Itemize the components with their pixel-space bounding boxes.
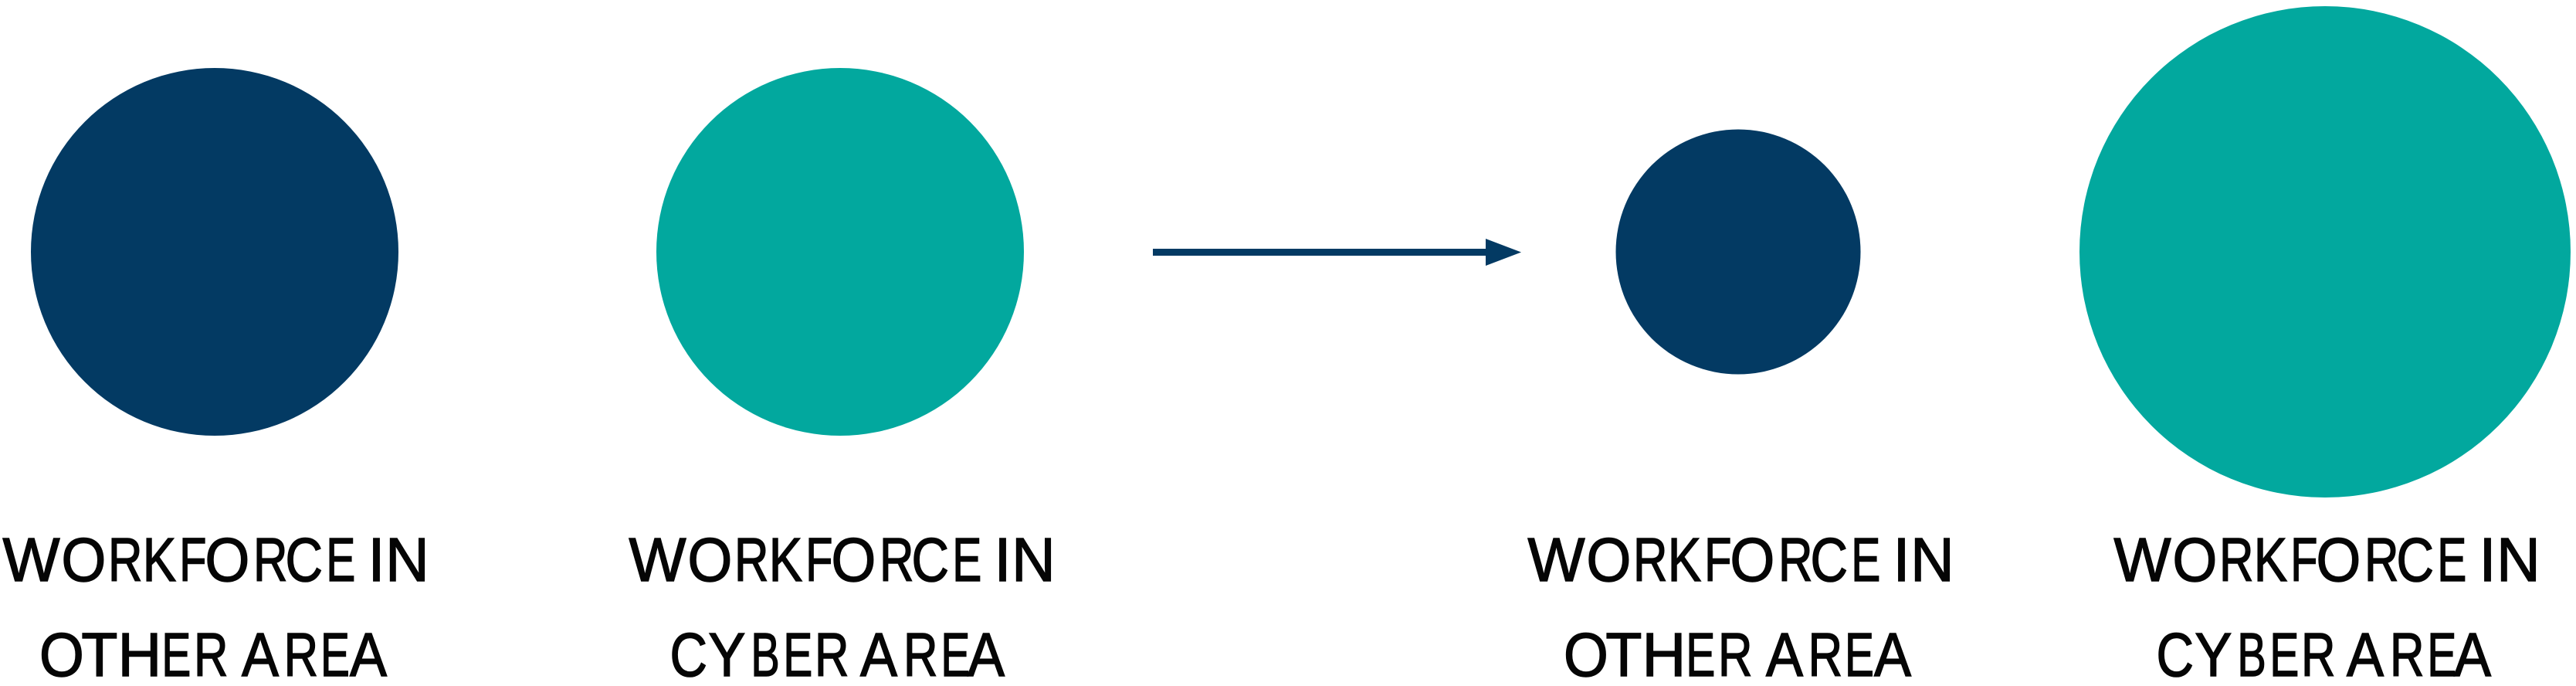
label: workforce in cyber area, before: F [805, 525, 832, 594]
label: workforce in other area, after: N [1910, 525, 1954, 594]
label: workforce in cyber area, after: C [2397, 525, 2434, 594]
label: workforce in other area, before: C [286, 525, 323, 594]
label: workforce in cyber area, before: O [687, 525, 732, 594]
circle: workforce in other area, after [1615, 130, 1861, 374]
arrow [1153, 239, 1521, 266]
label: workforce in cyber area, after: O [2173, 525, 2217, 594]
label: workforce in other area, before: O [205, 525, 249, 594]
label: workforce in other area, before: R [253, 525, 287, 594]
circle: workforce in cyber area, after [2079, 6, 2571, 498]
label: workforce in other area, after: I [1893, 525, 1910, 594]
label: workforce in cyber area, before: O [831, 525, 876, 594]
label: workforce in other area, before: K [143, 525, 176, 594]
label: workforce in other area, before: I [368, 525, 385, 594]
label: workforce in other area, before: O [62, 525, 106, 594]
label: workforce in cyber area, before: R [880, 525, 914, 594]
label: workforce in cyber area, after: W [2114, 525, 2171, 594]
label: workforce in other area, after: W [1527, 525, 1585, 594]
label: workforce in other area, after: C [1810, 525, 1848, 594]
label: workforce in other area, before: N [385, 525, 429, 594]
label: workforce in cyber area, after: K [2254, 525, 2287, 594]
label: workforce in other area, before: E [326, 525, 355, 594]
label: workforce in cyber area, after: N [2496, 525, 2540, 594]
label: workforce in other area, before [3, 525, 429, 686]
label: workforce in cyber area, after: E [2437, 525, 2466, 594]
label: workforce in cyber area, before: C [911, 525, 949, 594]
label: workforce in other area, after: O [1730, 525, 1774, 594]
label: workforce in other area, after: E [1851, 525, 1880, 594]
label: workforce in cyber area, before: R [734, 525, 769, 594]
circle: workforce in cyber area, before [656, 68, 1024, 436]
label: workforce in cyber area, before: W [629, 525, 686, 594]
label: workforce in cyber area, after: F [2290, 525, 2318, 594]
label: workforce in cyber area, before: I [995, 525, 1012, 594]
label: workforce in other area, before: R [108, 525, 142, 594]
label: workforce in other area, after: R [1778, 525, 1813, 594]
label: workforce in cyber area, after: R [2219, 525, 2253, 594]
label: workforce in other area, after: O [1586, 525, 1631, 594]
label: workforce in cyber area, after: R [2364, 525, 2398, 594]
circle: workforce in other area, before [31, 68, 398, 436]
label: workforce in other area, after [1527, 525, 1954, 686]
label: workforce in cyber area, before: E [952, 525, 981, 594]
label: workforce in cyber area, before [629, 525, 1056, 686]
label: workforce in cyber area, before: K [769, 525, 802, 594]
label: workforce in cyber area, after: I [2479, 525, 2496, 594]
label: workforce in cyber area, before: N [1012, 525, 1056, 594]
label: workforce in cyber area, after [2114, 525, 2540, 686]
label: workforce in other area, after: F [1704, 525, 1731, 594]
label: workforce in other area, after: R [1633, 525, 1668, 594]
label: workforce in other area, after: K [1668, 525, 1701, 594]
label: workforce in cyber area, after: O [2317, 525, 2361, 594]
label: workforce in other area, before: W [3, 525, 60, 594]
label: workforce in other area, before: F [179, 525, 207, 594]
